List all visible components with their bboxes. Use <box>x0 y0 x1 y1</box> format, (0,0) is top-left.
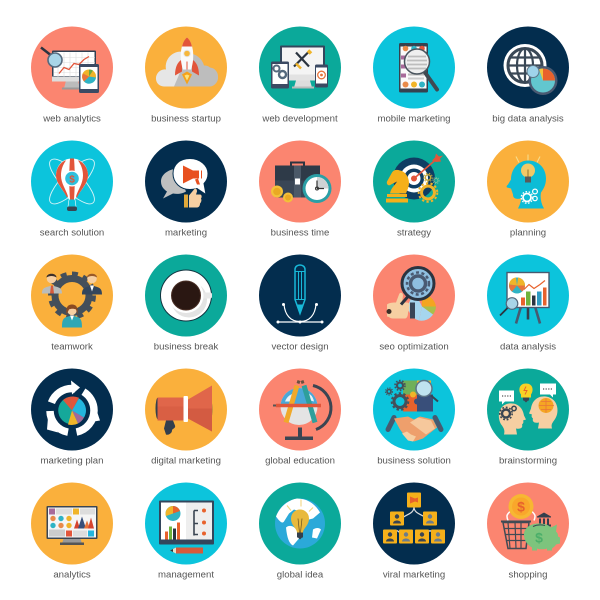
label: global education <box>265 456 335 466</box>
label: mobile marketing <box>377 114 451 124</box>
label: strategy <box>397 228 431 238</box>
panel: web development <box>259 26 341 124</box>
panel: business break <box>145 254 227 352</box>
panel: marketing <box>145 140 227 238</box>
icon: hierarchy tree <box>383 492 445 544</box>
panel: web analytics <box>31 26 113 124</box>
panel: brainstorming <box>487 368 569 466</box>
panel: business startup <box>145 26 227 124</box>
panel: data analysis <box>487 254 569 352</box>
label: business time <box>271 228 329 238</box>
icon: devices with tools <box>271 46 328 88</box>
label: business solution <box>377 456 451 466</box>
icon: briefcase, clock and coins <box>271 162 332 203</box>
label: web analytics <box>42 114 101 124</box>
panel: business time <box>259 140 341 238</box>
panel: teamwork <box>31 254 113 352</box>
label: global idea <box>277 570 324 580</box>
icon: phone and magnifier <box>399 43 437 92</box>
label: marketing <box>165 228 207 238</box>
label: big data analysis <box>492 114 564 124</box>
panel: global education <box>259 368 341 466</box>
icon: megaphone <box>156 386 212 435</box>
panel: mobile marketing <box>373 26 455 124</box>
label: management <box>158 570 214 580</box>
label: business break <box>154 342 218 352</box>
panel: big data analysis <box>487 26 569 124</box>
icon: monitor with chart and tablet <box>41 48 99 93</box>
label: viral marketing <box>383 570 445 580</box>
label: web development <box>261 114 338 124</box>
panel: vector design <box>259 254 341 352</box>
panel: digital marketing <box>145 368 227 466</box>
label: marketing plan <box>41 456 103 466</box>
icon: two heads with bulb <box>499 384 558 434</box>
icon: gears, puzzle and handshake <box>386 380 441 442</box>
icon: circular arrows with pie <box>47 380 100 432</box>
icon: basket, coin, bank and piggy <box>501 494 560 550</box>
panel: planning <box>487 140 569 238</box>
icon: globe with light bulb <box>275 498 325 548</box>
panel: analytics <box>31 482 113 580</box>
icon: basket, coin, bank and piggy: $ <box>517 498 525 514</box>
panel: global idea <box>259 482 341 580</box>
label: analytics <box>53 570 91 580</box>
panel: management <box>145 482 227 580</box>
panel: seo optimization <box>373 254 455 352</box>
label: search solution <box>40 228 104 238</box>
icon: team around gear <box>42 274 102 328</box>
panel: viral marketing <box>373 482 455 580</box>
label: brainstorming <box>499 456 557 466</box>
icon: globe with pencils <box>273 380 331 440</box>
icon: target, chess knight and gears <box>386 154 443 202</box>
icon: globe with pie magnifier <box>504 44 558 95</box>
icon: board with charts and pencil <box>159 500 214 554</box>
icon: speech bubbles, megaphone and thumb <box>161 158 208 208</box>
icon: head with bulb and gears <box>507 154 546 208</box>
icon: rocket over cloud <box>156 38 218 87</box>
label: vector design <box>271 342 329 352</box>
label: data analysis <box>500 342 556 352</box>
panel: business solution <box>373 368 455 466</box>
label: business startup <box>151 114 221 124</box>
icon: pen with bezier curve <box>276 265 324 324</box>
label: digital marketing <box>151 456 221 466</box>
icon: coffee cup on saucer <box>160 270 212 322</box>
label: planning <box>510 228 546 238</box>
panel: shopping <box>487 482 569 580</box>
icon: basket, coin, bank and piggy: $ <box>535 530 543 546</box>
icon: hot air balloon with orbits: $ <box>69 174 75 186</box>
label: shopping <box>509 570 547 580</box>
panel: search solution <box>31 140 113 238</box>
label: teamwork <box>51 342 93 352</box>
panel: marketing plan <box>31 368 113 466</box>
icon: thumb, pie and gear magnifier <box>386 268 436 321</box>
label: seo optimization <box>379 342 449 352</box>
icon: desktop monitor dashboard <box>46 506 98 545</box>
panel: strategy <box>373 140 455 238</box>
icon: presentation board with charts <box>500 272 549 324</box>
